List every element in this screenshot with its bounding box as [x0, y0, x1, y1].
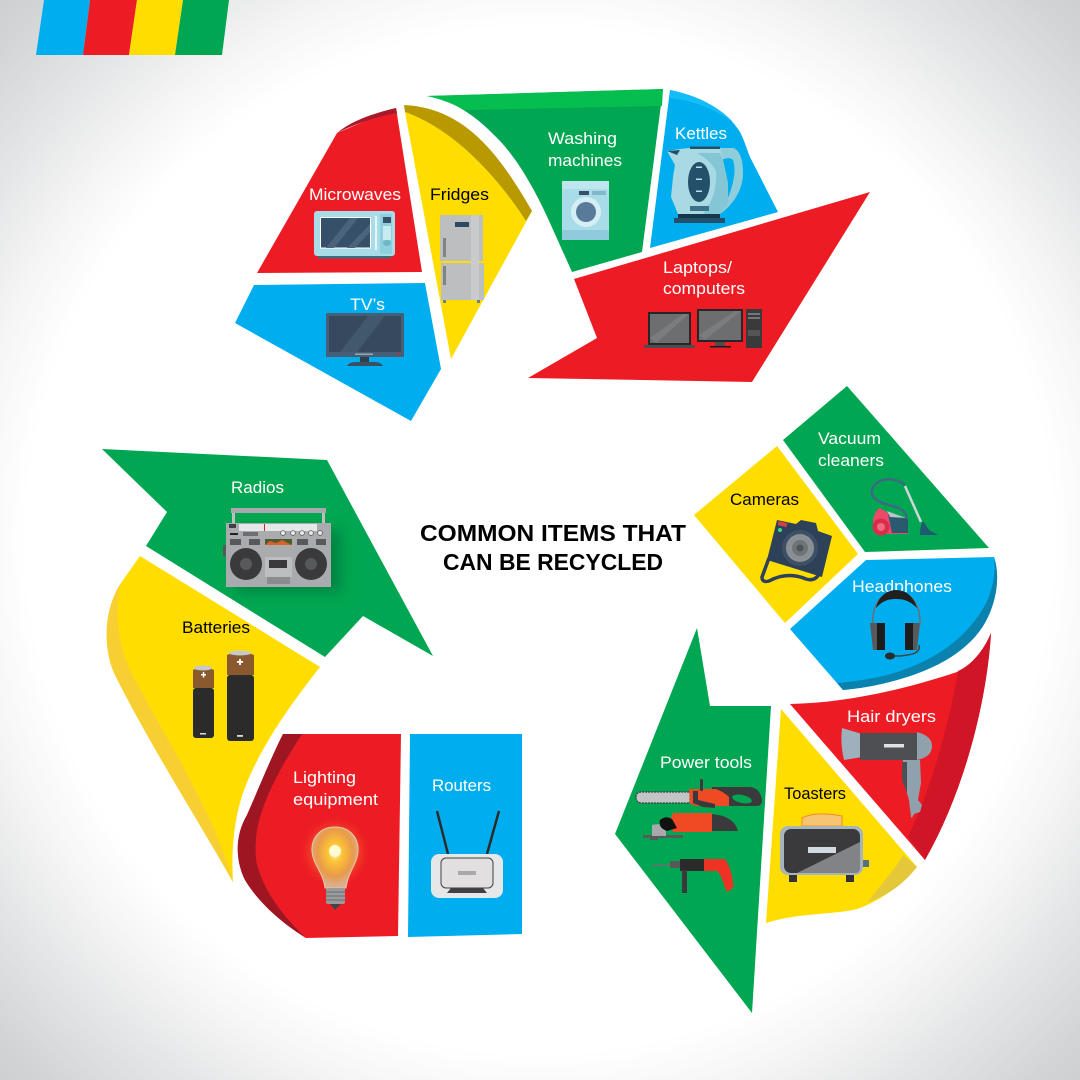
panel: batteries: Batteries	[182, 618, 250, 637]
panel: vacuum cleaners	[783, 386, 989, 552]
panel: vacuum cleaners: cleaners	[818, 451, 884, 470]
panel: radios	[102, 449, 433, 657]
icon: washing machine	[562, 181, 609, 240]
panel: hair dryers	[790, 633, 991, 860]
icon: camera	[762, 520, 832, 582]
panel: hair dryers: Hair dryers	[847, 707, 936, 726]
icon: vacuum cleaner	[872, 479, 938, 536]
icon: toaster	[780, 814, 869, 882]
panel: microwaves: Microwaves	[309, 185, 401, 204]
panel: cameras: Cameras	[730, 490, 799, 509]
panel: washing machines: Washing	[548, 129, 617, 148]
panel: toasters	[766, 709, 917, 923]
panel: laptops and computers	[528, 192, 870, 382]
panel: TVs: TV’s	[350, 295, 385, 314]
icon: angle grinder	[643, 813, 738, 840]
panel: laptops and computers: computers	[663, 279, 745, 298]
icon: headset	[870, 590, 920, 660]
icon: hammer drill	[652, 859, 733, 893]
panel: microwaves	[257, 108, 422, 273]
panel: lighting equipment: Lighting	[293, 768, 356, 787]
panel: lighting equipment: equipment	[293, 790, 378, 809]
icon: fridge	[440, 215, 484, 303]
icon: kettle	[667, 146, 743, 223]
panel: power tools	[615, 628, 771, 1013]
icon: boombox radio	[223, 508, 331, 587]
panel: cameras	[694, 446, 858, 623]
panel: routers	[408, 734, 522, 937]
panel: fridges	[404, 105, 532, 359]
icon: computers	[644, 309, 762, 348]
panel: power tools: Power tools	[660, 753, 752, 772]
icon: light bulb	[299, 816, 371, 910]
icon: television	[326, 313, 404, 366]
icon: router	[431, 811, 503, 898]
panel: fridges: Fridges	[430, 185, 489, 204]
title: COMMON ITEMS THAT	[420, 520, 686, 546]
panel: vacuum cleaners: Vacuum	[818, 429, 881, 448]
panel: kettles: Kettles	[675, 124, 727, 143]
icon: batteries	[193, 650, 254, 741]
panel: washing machines: machines	[548, 151, 622, 170]
panel: washing machines	[427, 89, 663, 272]
icon: chainsaw	[636, 779, 762, 808]
title	[420, 520, 686, 575]
panel: batteries	[107, 556, 320, 882]
panel: TVs	[235, 283, 441, 421]
panel: lighting equipment	[238, 734, 401, 938]
title: CAN BE RECYCLED	[443, 549, 663, 575]
icon: microwave	[314, 211, 395, 258]
icon: hair dryer	[841, 728, 932, 818]
panel: laptops and computers: Laptops/	[663, 258, 732, 277]
panel: radios: Radios	[231, 478, 284, 497]
panel: routers: Routers	[432, 776, 491, 795]
panel: toasters: Toasters	[784, 784, 846, 803]
panel: kettles	[650, 90, 778, 248]
panel: headphones: Headphones	[852, 577, 952, 596]
logo: colour stripes	[36, 0, 229, 55]
panel: headphones	[790, 557, 997, 690]
